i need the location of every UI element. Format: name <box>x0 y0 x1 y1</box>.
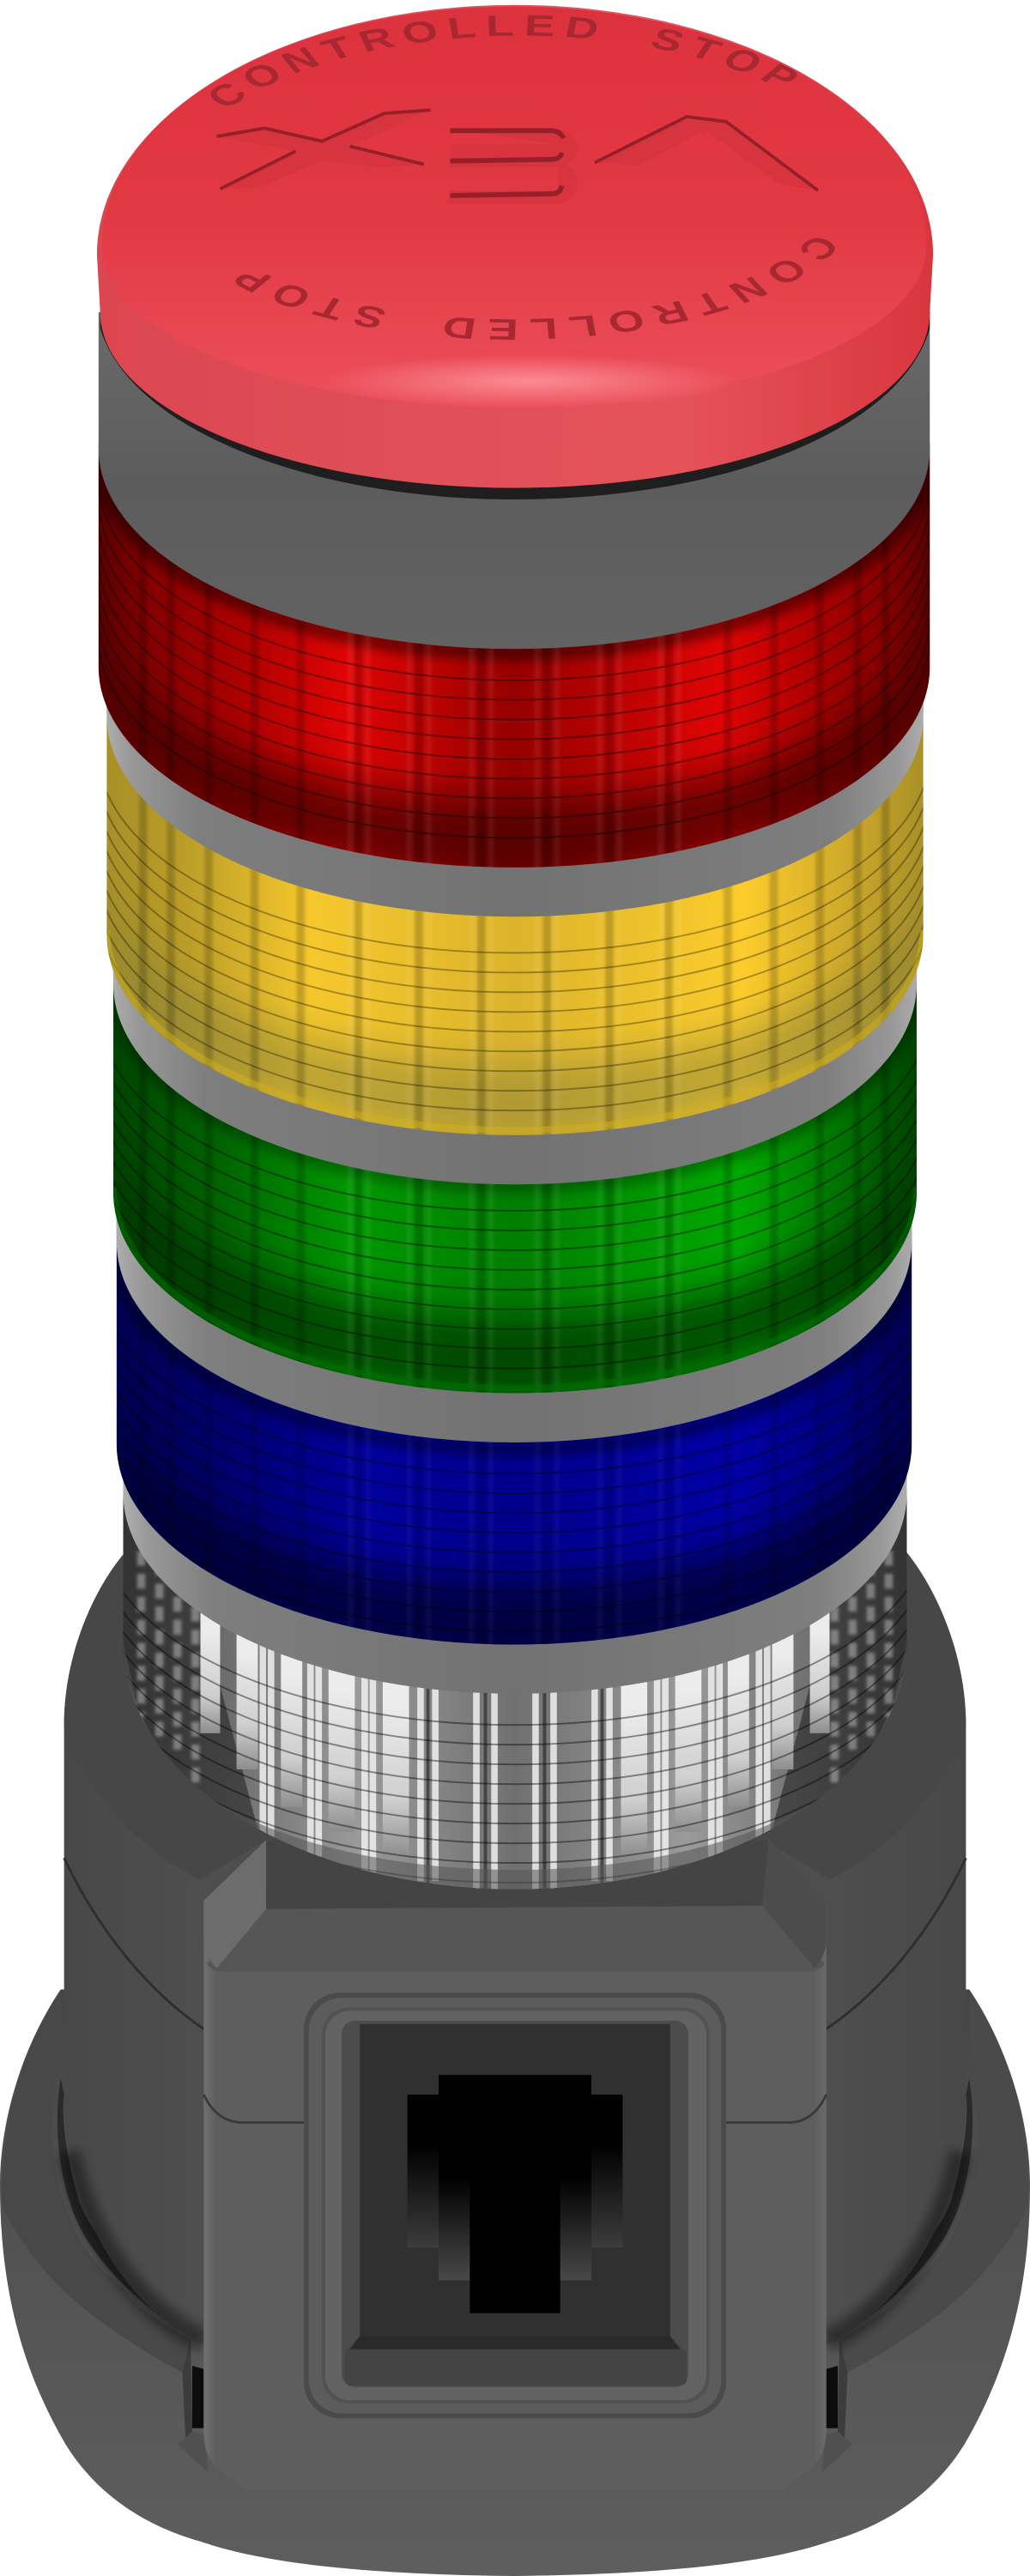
logo middle <box>447 128 579 203</box>
clear lens bright stripes <box>259 1645 771 1890</box>
clear lens side checks <box>142 1528 888 1782</box>
flange lip right <box>821 1990 1028 2472</box>
lens: clear <box>99 1478 930 1890</box>
engraved text bottom: CONTROLLED STOP <box>235 239 835 340</box>
cap rim <box>97 5 933 488</box>
port frame <box>304 1992 726 2418</box>
upper body <box>64 1552 966 2346</box>
gray collar <box>99 312 930 649</box>
clear lens dark side cells <box>124 1498 258 1829</box>
port recess <box>360 2024 670 2336</box>
spacer ring above yellow lens <box>102 460 928 916</box>
logo X <box>217 110 430 189</box>
cap highlight <box>324 355 735 408</box>
clear lens panels <box>201 1613 829 1853</box>
spacer ring above green lens <box>108 723 922 1184</box>
lens: yellow <box>106 707 924 1135</box>
logo caret <box>595 117 818 190</box>
engraved text top: CONTROLLED STOP <box>210 15 797 106</box>
black gasket <box>100 312 930 499</box>
housing top recess <box>266 1840 769 1909</box>
spacer ring above clear lens <box>122 1249 908 1694</box>
lens: red <box>98 443 930 868</box>
clear lens bottom rim <box>124 1643 906 1890</box>
base flange <box>0 1990 1030 2576</box>
lens: blue <box>117 1224 912 1644</box>
body annular top <box>64 1552 966 1879</box>
lens: green <box>113 982 917 1394</box>
flange lip left <box>2 1990 209 2472</box>
housing top face <box>207 1906 825 1971</box>
red cap <box>96 5 934 488</box>
jack opening <box>408 2075 622 2313</box>
connector housing <box>203 1840 827 2490</box>
logo mark <box>217 110 818 203</box>
cap face <box>102 7 926 408</box>
spacer ring above blue lens <box>113 986 917 1442</box>
